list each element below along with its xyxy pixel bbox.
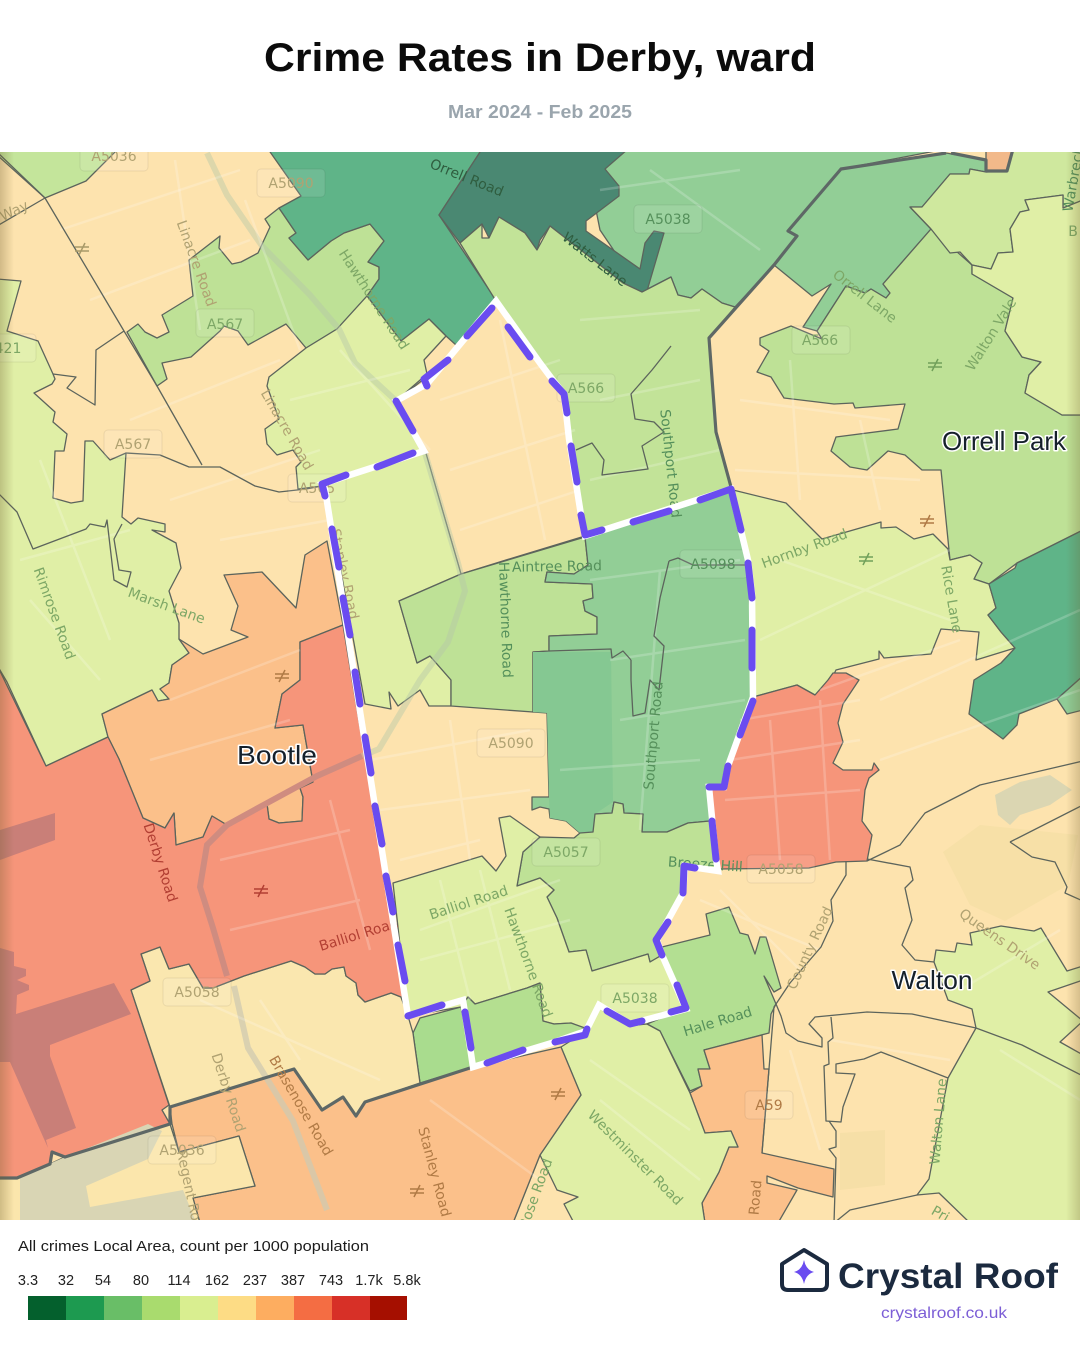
area: north-west mid green xyxy=(127,208,384,386)
cemetery shade xyxy=(840,1130,885,1190)
road shield labels: A5090 xyxy=(268,176,314,192)
dock land grey xyxy=(20,1124,195,1220)
road name labels: Stanley Road xyxy=(414,1125,454,1219)
title: Crime Rates in Derby, ward xyxy=(264,36,816,80)
area: Westminster light green xyxy=(540,1010,739,1220)
road name labels: Orrell Lane xyxy=(829,267,900,327)
Derby ward outline: purple dashes xyxy=(322,308,753,1063)
ward boundary lines xyxy=(0,152,1080,1223)
road shield labels: A5057 xyxy=(543,845,589,861)
road shield labels: A5098 xyxy=(690,557,736,573)
legend colour scale xyxy=(28,1296,407,1320)
area: east teal xyxy=(969,530,1080,739)
road name labels: County Road xyxy=(784,904,837,992)
legend title: All crimes Local Area, count per 1000 population xyxy=(18,1239,369,1255)
area: north-west corner green xyxy=(0,149,118,198)
legend values xyxy=(18,1273,421,1289)
area: north light green beside ward xyxy=(265,296,446,489)
area: central medium green xyxy=(532,489,753,859)
road name labels: Brasenose Road xyxy=(265,1053,336,1159)
road shield labels: B xyxy=(1068,224,1078,240)
dock: upper xyxy=(0,813,55,860)
road name labels: Southport Road xyxy=(656,409,684,519)
road name labels: Rose Road xyxy=(516,1157,556,1231)
place names: Walton xyxy=(892,965,972,995)
road name labels: Walton Vale xyxy=(963,296,1020,374)
area: dock pale south-west xyxy=(52,1125,256,1220)
road name labels: Westminster Road xyxy=(584,1107,686,1209)
road shield labels: A567 xyxy=(115,437,151,453)
road name labels: Orrell Road xyxy=(427,156,506,200)
canal across red xyxy=(200,756,362,976)
road name labels: Hawthorne Road xyxy=(495,562,515,678)
docks and water features xyxy=(0,153,1078,1220)
pond xyxy=(995,775,1072,825)
legend values: 114 xyxy=(167,1273,191,1289)
place names xyxy=(237,426,1067,995)
legend values: 162 xyxy=(205,1273,229,1289)
road shield labels: A5090 xyxy=(488,736,534,752)
area: Hale Road mid green xyxy=(647,907,781,1091)
road name labels: Hale Road xyxy=(681,1004,754,1040)
road shield labels xyxy=(0,149,1078,1159)
road shield labels: A5058 xyxy=(758,862,804,878)
base area: cream crime band xyxy=(0,152,1080,1220)
road shield labels: A59 xyxy=(755,1098,783,1114)
legend values: 3.3 xyxy=(18,1273,38,1289)
area: ward cream north xyxy=(410,358,582,574)
road name labels: Marsh Lane xyxy=(126,585,207,628)
area: green patch outside ward xyxy=(413,1007,473,1083)
map edge vignette xyxy=(0,152,1080,1220)
area: green patch lower ward xyxy=(461,983,585,1067)
road name labels: Breeze Hill xyxy=(667,854,743,876)
road name labels: Road xyxy=(747,1179,766,1216)
area: top medium green xyxy=(590,149,946,307)
area: east red xyxy=(709,673,879,869)
canal xyxy=(207,153,465,756)
road name labels: Hornby Road xyxy=(759,526,850,572)
canal south xyxy=(234,986,327,1210)
place names: Bootle xyxy=(237,740,317,770)
road shield labels: A5038 xyxy=(645,212,691,228)
road name labels: Regent Road xyxy=(173,1149,207,1239)
road name labels: Hawthorne Road xyxy=(500,905,555,1020)
road shield labels: A5058 xyxy=(174,985,220,1001)
area: Walton south-east light green xyxy=(917,926,1080,1223)
area: Stanley Road orange xyxy=(170,1047,581,1223)
road shield labels: A5038 xyxy=(612,991,658,1007)
area: east light green xyxy=(733,490,1015,697)
brand logo xyxy=(782,1250,1058,1322)
area: ward light green column xyxy=(325,450,461,709)
road name labels: Southport Road xyxy=(641,681,667,791)
road name labels: Linacre Road xyxy=(257,387,316,473)
area: top right medium green xyxy=(774,153,986,331)
legend values: 80 xyxy=(133,1273,149,1289)
subtitle: date range: Mar 2024 - Feb 2025 xyxy=(448,102,632,122)
road name labels: Stanley Road xyxy=(327,527,361,621)
Derby ward outline: white base xyxy=(322,301,753,1067)
street network xyxy=(20,160,1080,1180)
area: darkest green north xyxy=(439,149,664,292)
area: north central mid green xyxy=(460,217,735,536)
legend values: 5.8k xyxy=(393,1273,421,1289)
legend values: 387 xyxy=(281,1273,305,1289)
road name labels: Rice Lane xyxy=(937,564,965,634)
road name labels: Derby Road xyxy=(208,1051,248,1134)
road shield labels: A565 xyxy=(299,481,335,497)
area: Balliol light green xyxy=(393,816,688,1030)
road shield labels: A567 xyxy=(207,317,243,333)
railway station icons xyxy=(75,243,942,1197)
thick district boundary xyxy=(0,149,1013,1178)
legend values: 54 xyxy=(95,1273,111,1289)
road name labels: Balliol Road xyxy=(317,916,400,955)
road name labels: Queens Drive xyxy=(956,906,1043,974)
legend values: 237 xyxy=(243,1273,267,1289)
road name labels: Rimrose Road xyxy=(30,565,78,662)
road name labels: Aintree Road xyxy=(512,558,602,576)
road name labels: Watts Lane xyxy=(559,229,630,290)
choropleth ward areas xyxy=(0,149,1080,1223)
area: central darker green xyxy=(533,652,613,833)
road shield labels: A566 xyxy=(568,381,604,397)
road shield labels: A566 xyxy=(802,333,838,349)
legend xyxy=(18,1239,421,1320)
park shade east xyxy=(943,825,1078,921)
brand url: crystalroof.co.uk xyxy=(881,1305,1008,1322)
area: Bootle orange xyxy=(102,541,343,845)
area: Bootle red xyxy=(0,625,408,1178)
area: A5058 pale cream xyxy=(131,947,420,1116)
legend values: 1.7k xyxy=(355,1273,383,1289)
area: Aintree mid green xyxy=(399,537,597,712)
area: west light green xyxy=(0,279,189,766)
area: small cream south xyxy=(513,1155,578,1223)
legend values: 32 xyxy=(58,1273,74,1289)
dock: main xyxy=(0,948,131,1148)
road name labels: Walton Lane xyxy=(927,1078,951,1166)
area: north teal xyxy=(268,149,496,345)
road name labels: Derby Road xyxy=(140,821,180,904)
road shields xyxy=(0,146,850,1164)
area: north-east mid green xyxy=(757,229,1080,584)
area: far right light green xyxy=(972,195,1080,415)
area: small orange top right xyxy=(985,152,1010,170)
brand name: Crystal Roof xyxy=(838,1257,1058,1296)
road shield labels: A5036 xyxy=(91,149,137,165)
road name labels: Hawthorne Road xyxy=(335,247,412,353)
road name labels: Balliol Road xyxy=(427,883,510,923)
area: Breeze Hill mid green xyxy=(517,802,719,971)
area: A59 orange xyxy=(690,1035,834,1223)
road shield labels: A5036 xyxy=(159,1143,205,1159)
place names: Orrell Park xyxy=(942,426,1067,456)
legend values: 743 xyxy=(319,1273,343,1289)
road name labels: Pri xyxy=(928,1203,952,1226)
road name labels: Linacre Road xyxy=(173,218,219,309)
area: east corner green xyxy=(1057,676,1080,714)
area: top right pale green xyxy=(910,149,1080,269)
icon: house with star xyxy=(782,1250,827,1290)
